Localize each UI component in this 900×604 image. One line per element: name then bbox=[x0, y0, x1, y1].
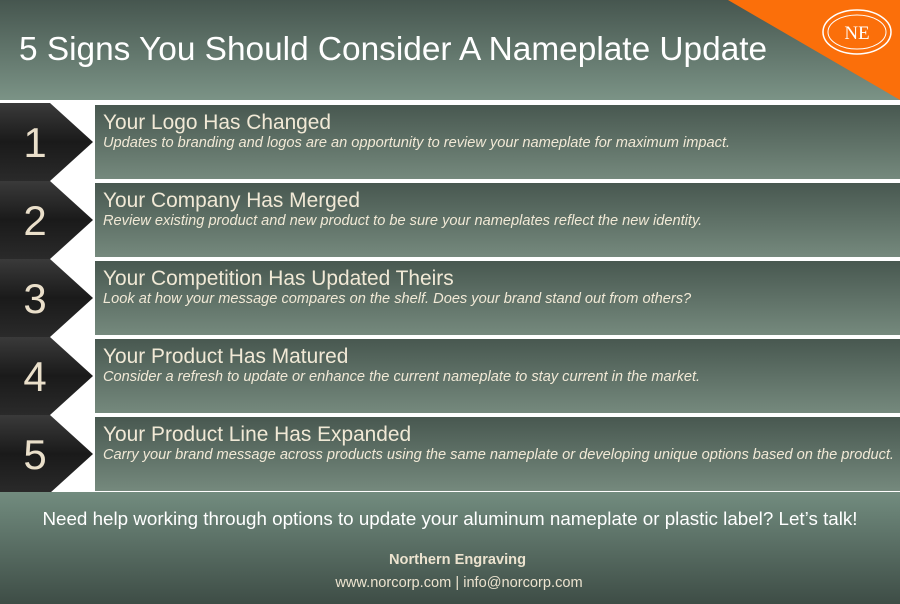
arrow 2 bbox=[0, 181, 93, 259]
panel 5 bbox=[95, 417, 900, 491]
arrow 5 bbox=[0, 415, 93, 492]
panel 1: Your Logo Has Changed bbox=[103, 111, 331, 134]
arrow 4 bbox=[0, 337, 93, 415]
panel 3: Look at how your message compares on the shelf. Does your brand stand out from others? bbox=[103, 291, 691, 307]
number 4: 4 bbox=[23, 353, 47, 400]
panel 4 bbox=[95, 339, 900, 413]
panel 4: Your Product Has Matured bbox=[103, 345, 348, 368]
number 3: 3 bbox=[23, 275, 47, 322]
panel 2 bbox=[95, 183, 900, 257]
panel 1: Updates to branding and logos are an opportunity to review your nameplate for maximum impact. bbox=[103, 135, 730, 151]
panel 1 bbox=[95, 105, 900, 179]
header banner bbox=[0, 0, 900, 100]
row 5 bbox=[0, 415, 900, 492]
row 2 bbox=[0, 181, 900, 259]
panel 5: Carry your brand message across products using the same nameplate or developing unique options based on the product. bbox=[103, 447, 894, 463]
panel 4: Consider a refresh to update or enhance the current nameplate to stay current in the market. bbox=[103, 369, 700, 385]
footer bbox=[0, 492, 900, 604]
orange corner triangle bbox=[728, 0, 900, 100]
number 2: 2 bbox=[23, 197, 47, 244]
company name: Northern Engraving bbox=[389, 552, 526, 568]
contact info: www.norcorp.com | info@norcorp.com bbox=[335, 575, 583, 591]
title: 5 Signs You Should Consider A Nameplate Update bbox=[19, 31, 767, 68]
arrow 1 bbox=[0, 103, 93, 181]
panel 3 bbox=[95, 261, 900, 335]
panel 5: Your Product Line Has Expanded bbox=[103, 423, 411, 446]
arrow 3 bbox=[0, 259, 93, 337]
panel 3: Your Competition Has Updated Theirs bbox=[103, 267, 454, 290]
row 3 bbox=[0, 259, 900, 337]
panel 2: Review existing product and new product to be sure your nameplates reflect the new identity. bbox=[103, 213, 702, 229]
row 1 bbox=[0, 103, 900, 181]
panel 2: Your Company Has Merged bbox=[103, 189, 360, 212]
number 1: 1 bbox=[23, 119, 47, 166]
number 5: 5 bbox=[23, 431, 47, 478]
logo NE: NE bbox=[844, 23, 870, 44]
row 4 bbox=[0, 337, 900, 415]
logo NE bbox=[822, 9, 892, 55]
call to action: Need help working through options to update your aluminum nameplate or plastic label? Let’s talk! bbox=[42, 508, 858, 529]
